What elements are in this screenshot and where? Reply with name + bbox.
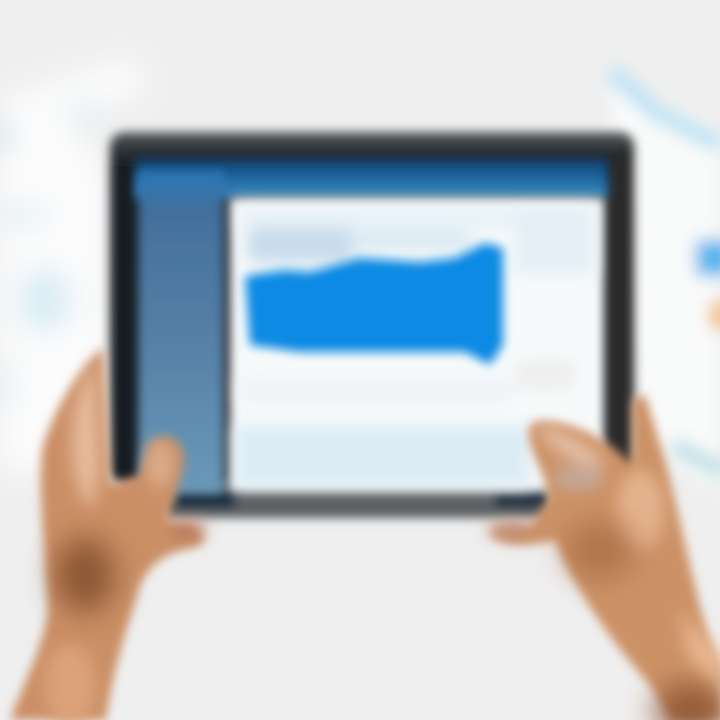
main panel xyxy=(230,198,604,491)
fingertip under tablet xyxy=(170,521,206,539)
tablet xyxy=(110,132,634,518)
palm shadow xyxy=(55,537,115,613)
tablet screen xyxy=(135,158,608,494)
palm shadow xyxy=(564,520,636,580)
upper band xyxy=(240,205,595,275)
palm and wrist xyxy=(10,348,203,720)
right hand xyxy=(488,395,720,720)
lower data rows xyxy=(235,360,575,487)
header bar xyxy=(135,158,608,198)
tablet frame xyxy=(110,132,634,518)
finger overlay tint xyxy=(552,466,604,490)
sidebar xyxy=(138,172,224,494)
floating charts: right xyxy=(610,72,720,490)
wrist shadow xyxy=(654,684,720,720)
fingertip under tablet xyxy=(488,521,532,539)
light highlights xyxy=(535,425,720,700)
left hand xyxy=(10,348,206,720)
floating charts: left xyxy=(0,58,150,475)
blue chart band xyxy=(245,243,503,365)
palm and wrist xyxy=(490,395,720,720)
light fingers and wrist highlights xyxy=(45,360,172,720)
